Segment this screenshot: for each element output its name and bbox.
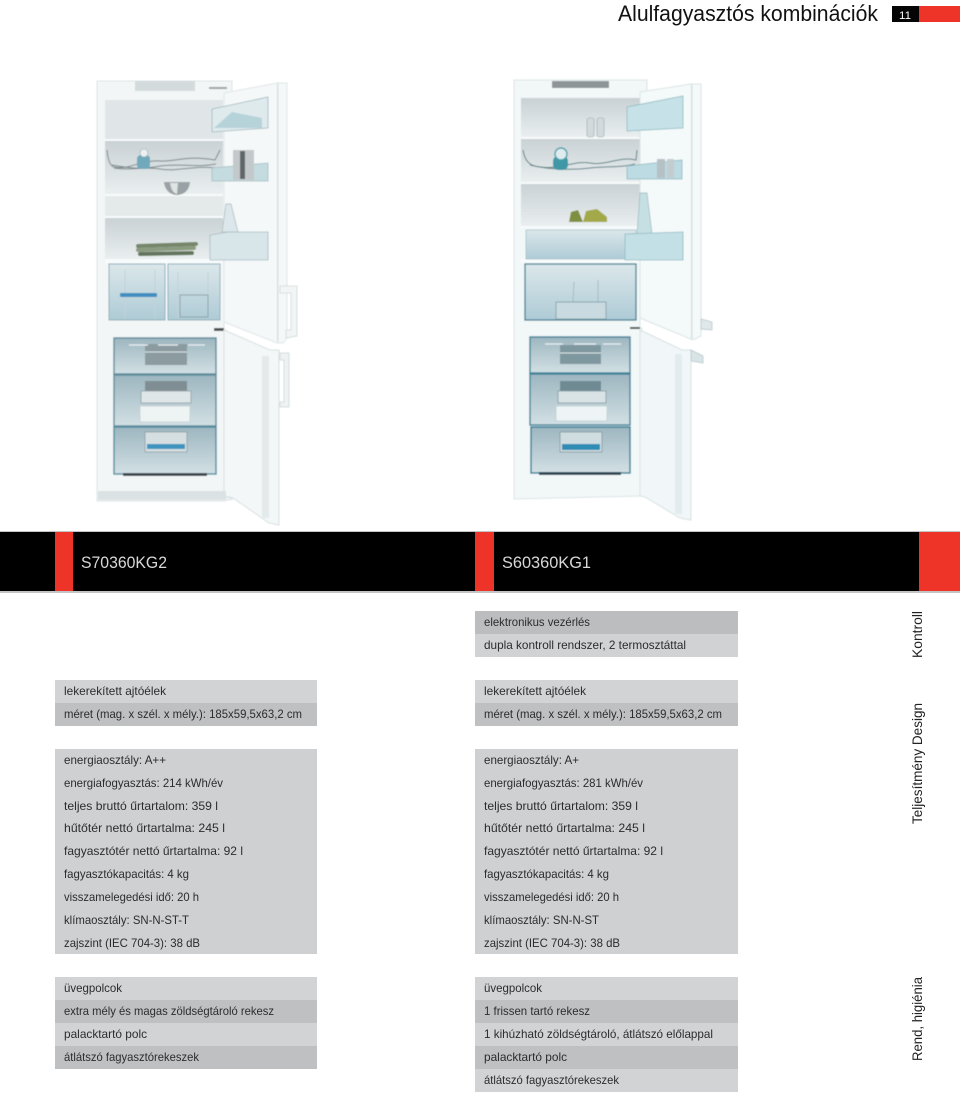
hinge	[630, 327, 640, 329]
lower door	[224, 330, 279, 525]
panel: performance specs left: zajszint (IEC 704-3): 38 dB	[64, 936, 200, 950]
panel: performance specs left	[55, 749, 317, 954]
panel: performance specs right: teljes bruttó űrtartalom: 359 l	[484, 799, 638, 813]
glass shelf tray	[526, 230, 636, 259]
panel: hygiene specs left: extra mély és magas zöldségtároló rekesz	[64, 1004, 274, 1018]
panel: design specs right: méret (mag. x szél. x mély.): 185x59,5x63,2 cm	[484, 707, 722, 721]
panel: hygiene specs left: üvegpolcok	[64, 981, 123, 995]
bottle on rack	[553, 148, 568, 170]
panel: performance specs left: klímaosztály: SN-N-ST-T	[64, 913, 190, 927]
upper door	[640, 84, 701, 340]
wine rack	[107, 150, 220, 170]
panel: performance specs left: fagyasztótér nettó űrtartalma: 92 l	[64, 844, 243, 858]
panel: hygiene specs left	[55, 977, 317, 1069]
lower door handle	[280, 353, 289, 407]
photo: fridge S70360KG2	[97, 81, 297, 525]
panel: hygiene specs right: 1 frissen tartó rekesz	[484, 1004, 590, 1018]
panel: performance specs right: klímaosztály: SN-N-ST	[484, 913, 600, 927]
side label: Teljesítmény Design: Teljesítmény Design	[909, 703, 925, 824]
page number tab: 11	[899, 10, 911, 22]
panel: performance specs right	[475, 749, 738, 954]
fruit	[569, 209, 607, 222]
panel: hygiene specs left: palacktartó polc	[64, 1027, 147, 1041]
crisper drawers	[109, 264, 220, 320]
panel: performance specs left: hűtőtér nettó űrtartalma: 245 l	[64, 821, 225, 835]
panel: performance specs left: teljes bruttó űrtartalom: 359 l	[64, 799, 218, 813]
model name right: S60360KG1	[502, 553, 591, 572]
door shelf middle	[627, 159, 682, 179]
door shelf top	[627, 96, 683, 131]
panel: performance specs right: zajszint (IEC 704-3): 38 dB	[484, 936, 620, 950]
panel: hygiene specs left: átlátszó fagyasztórekeszek	[64, 1050, 200, 1064]
page number tab	[892, 6, 960, 22]
photo: fridge S60360KG1	[514, 80, 712, 520]
bottle on rack	[137, 149, 150, 169]
panel: control specs right: elektronikus vezérlés	[484, 615, 590, 629]
panel: hygiene specs right: 1 kihúzható zöldségtároló, átlátszó előlappal	[484, 1027, 713, 1041]
crisper drawer	[525, 264, 636, 320]
lower door handle	[691, 350, 703, 363]
wine rack	[523, 150, 637, 169]
side label: Rend, higiénia: Rend, higiénia	[909, 977, 925, 1061]
black model band	[0, 531, 960, 593]
hinge	[214, 328, 224, 331]
door shelf top	[212, 97, 268, 132]
small bottles	[587, 118, 604, 137]
fridge body	[514, 80, 647, 499]
door shelf bottom with bottle	[210, 204, 268, 260]
panel: hygiene specs right: üvegpolcok	[484, 981, 543, 995]
panel: design specs right: lekerekített ajtóélek	[484, 684, 587, 698]
fridge compartment	[521, 98, 640, 227]
panel: performance specs left: visszamelegedési idő: 20 h	[64, 890, 199, 904]
panel: performance specs right: fagyasztókapacitás: 4 kg	[484, 867, 609, 881]
panel: performance specs left: energiafogyasztás: 214 kWh/év	[64, 776, 223, 790]
panel: design specs left: méret (mag. x szél. x mély.): 185x59,5x63,2 cm	[64, 707, 302, 721]
vegetables	[138, 244, 196, 254]
panel: performance specs right: visszamelegedési idő: 20 h	[484, 890, 619, 904]
panel: performance specs right: energiafogyasztás: 281 kWh/év	[484, 776, 643, 790]
model name left: S70360KG2	[81, 553, 167, 572]
panel: design specs left: lekerekített ajtóélek	[64, 684, 167, 698]
panel: control specs right: dupla kontroll rendszer, 2 termosztáttal	[484, 638, 686, 652]
steel bowl	[164, 182, 190, 195]
panel: performance specs left: fagyasztókapacitás: 4 kg	[64, 867, 189, 881]
panel: performance specs right: energiaosztály: A+	[484, 753, 579, 767]
panel: design specs right	[475, 680, 738, 726]
upper door handle	[280, 286, 297, 338]
side label: Kontroll: Kontroll	[909, 611, 925, 658]
control panel	[552, 81, 609, 88]
door shelf bottom with bottle	[625, 193, 683, 260]
panel: hygiene specs right: átlátszó fagyasztórekeszek	[484, 1073, 620, 1087]
panel: design specs left	[55, 680, 317, 726]
upper door handle	[701, 319, 712, 330]
plinth	[98, 491, 226, 500]
panel: performance specs right: hűtőtér nettó űrtartalma: 245 l	[484, 821, 645, 835]
panel: hygiene specs right: palacktartó polc	[484, 1050, 567, 1064]
panel: performance specs left: energiaosztály: A++	[64, 753, 166, 767]
lower door	[640, 330, 691, 520]
control panel	[135, 81, 195, 91]
freezer drawers	[114, 338, 216, 476]
door shelf middle with can	[212, 150, 268, 181]
page title: Alulfagyasztós kombinációk	[618, 1, 879, 26]
panel: hygiene specs right	[475, 977, 738, 1092]
freezer drawers	[530, 337, 630, 475]
panel: performance specs right: fagyasztótér nettó űrtartalma: 92 l	[484, 844, 663, 858]
fridge body	[97, 81, 233, 501]
upper door	[224, 83, 287, 343]
fridge compartment	[105, 100, 223, 260]
panel: control specs right	[475, 611, 738, 657]
